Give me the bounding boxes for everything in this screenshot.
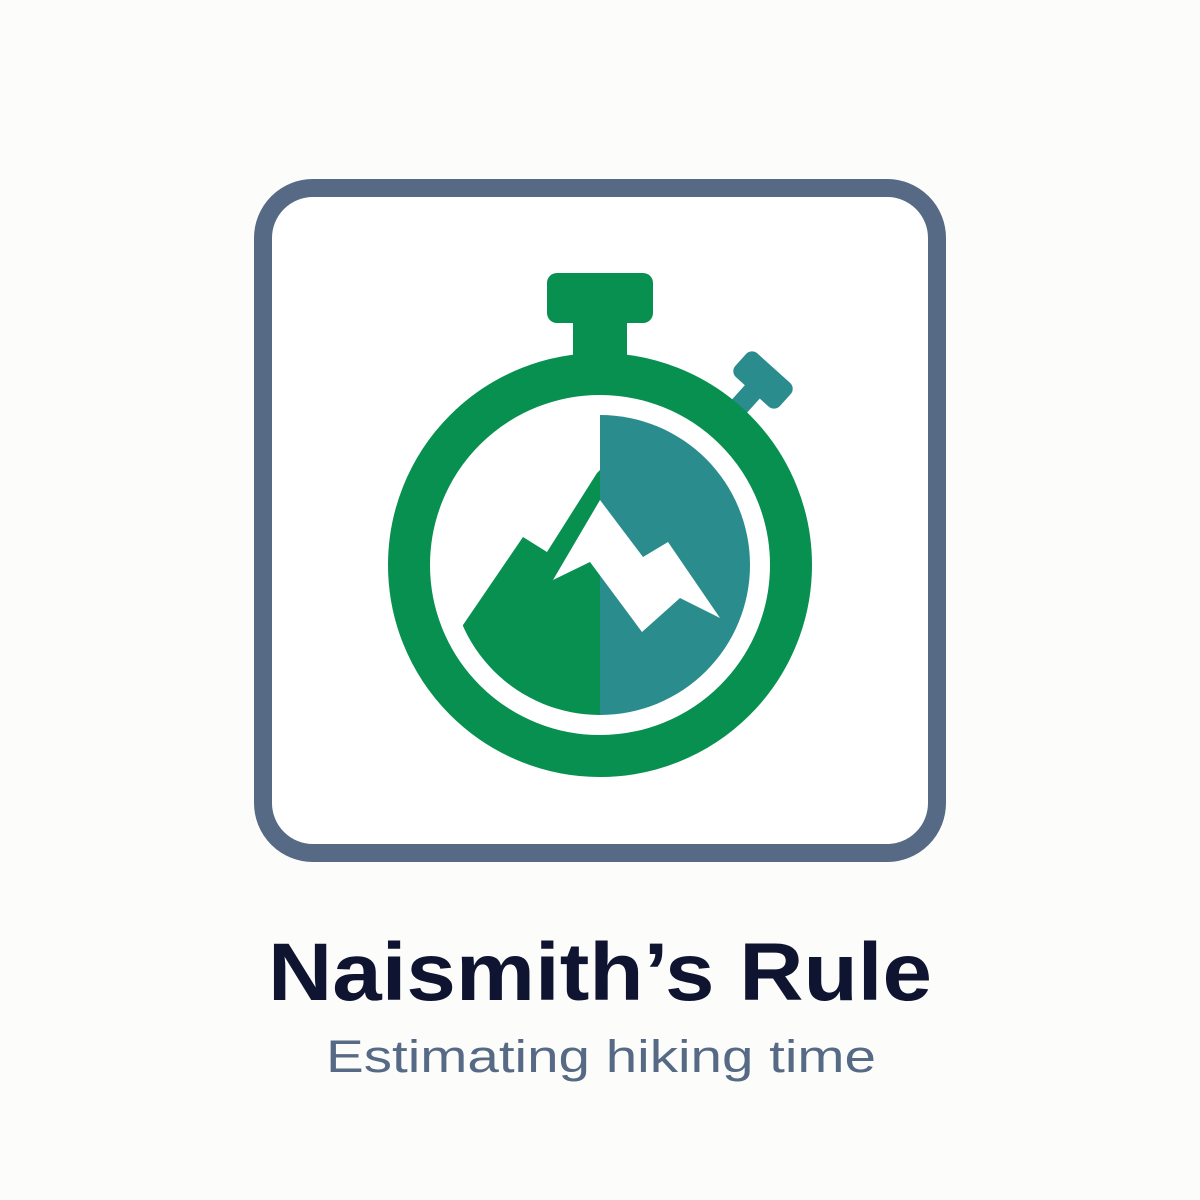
icon: stopwatch ring xyxy=(409,374,791,756)
icon: top button xyxy=(547,273,653,365)
icon: stopwatch with mountain xyxy=(409,273,796,756)
icon: side button xyxy=(714,348,796,430)
title: Naismith’s Rule xyxy=(268,927,932,1018)
subtitle: Estimating hiking time xyxy=(326,1031,876,1082)
panel: rounded frame xyxy=(263,188,937,853)
icon: mountain dial xyxy=(462,415,750,715)
